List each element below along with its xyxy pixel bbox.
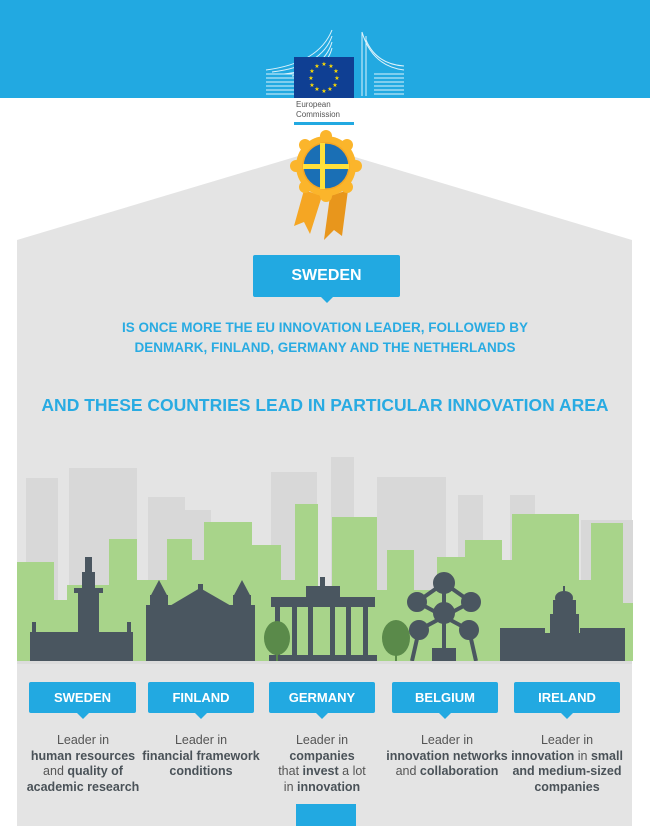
landmark: Stockholm city hall bbox=[30, 557, 133, 661]
EU Commission logo: ★ bbox=[328, 63, 334, 70]
label: Finland: FINLAND bbox=[172, 690, 230, 705]
landmark: Finland building bbox=[146, 580, 255, 661]
EU Commission logo: European bbox=[296, 100, 331, 109]
heading: countries lead: AND THESE COUNTRIES LEAD IN PARTICULAR INNOVATION AREA bbox=[41, 395, 609, 415]
EU Commission logo: ★ bbox=[333, 68, 339, 75]
callout: SWEDEN bbox=[253, 255, 400, 297]
text: Ireland desc: Leader in bbox=[541, 733, 593, 747]
EU Commission logo: ★ bbox=[321, 88, 327, 95]
bottom blue block bbox=[296, 804, 356, 826]
label: Belgium bbox=[392, 682, 498, 713]
EU Commission logo: ★ bbox=[332, 82, 338, 89]
EU Commission logo bbox=[266, 30, 404, 125]
trees bbox=[264, 620, 410, 661]
text: Finland desc: Leader in bbox=[175, 733, 227, 747]
label: Sweden: SWEDEN bbox=[54, 690, 111, 705]
text: Sweden desc bbox=[27, 733, 139, 794]
label: Ireland: IRELAND bbox=[538, 690, 596, 705]
label: Finland bbox=[148, 682, 254, 713]
label: Belgium: BELGIUM bbox=[415, 690, 475, 705]
text: Ireland desc: companies bbox=[534, 780, 600, 794]
ground strip bbox=[17, 661, 632, 664]
text: Sweden desc: human resources bbox=[31, 748, 135, 762]
icon: medal with Swedish flag bbox=[290, 130, 362, 240]
EU Commission logo: ★ bbox=[309, 68, 315, 75]
EU Commission logo: ★ bbox=[321, 61, 327, 68]
EU Commission logo: ★ bbox=[308, 75, 314, 82]
label: Sweden bbox=[29, 682, 136, 713]
text: Ireland desc bbox=[511, 733, 623, 794]
callout: SWEDEN: SWEDEN bbox=[291, 267, 362, 284]
landmark: Atomium bbox=[409, 574, 479, 661]
text: Germany desc: Leader in bbox=[296, 733, 348, 747]
text: Belgium desc: innovation networks bbox=[386, 748, 508, 762]
gray house shape bbox=[17, 148, 632, 826]
EU Commission logo: Commission bbox=[296, 110, 340, 119]
landmark: Brandenburg gate bbox=[269, 577, 377, 661]
text: Germany desc bbox=[278, 733, 366, 794]
text: Germany desc: in innovation bbox=[284, 780, 360, 794]
text: Ireland desc: innovation in small bbox=[511, 748, 623, 762]
label: Germany: GERMANY bbox=[289, 690, 355, 705]
top blue band bbox=[0, 0, 650, 98]
text: Sweden desc: academic research bbox=[27, 780, 139, 794]
text: innovation leader bbox=[122, 320, 528, 355]
text: Germany desc: that invest a lot bbox=[278, 764, 366, 778]
label: Germany bbox=[269, 682, 375, 713]
text: Finland desc: conditions bbox=[169, 764, 233, 778]
text: innovation leader: IS ONCE MORE THE EU INNOVATION LEADER, FOLLOWED BY bbox=[122, 320, 528, 335]
text: Finland desc bbox=[142, 733, 260, 778]
EU Commission logo: ★ bbox=[314, 86, 320, 93]
text: Finland desc: financial framework bbox=[142, 748, 260, 762]
text: Sweden desc: Leader in bbox=[57, 733, 109, 747]
gray back buildings bbox=[26, 457, 633, 661]
text: Ireland desc: and medium-sized bbox=[512, 764, 622, 778]
text: Belgium desc: and collaboration bbox=[396, 764, 498, 778]
text: innovation leader: DENMARK, FINLAND, GERMANY AND THE NETHERLANDS bbox=[134, 340, 516, 355]
EU Commission logo: ★ bbox=[309, 82, 315, 89]
text: Belgium desc bbox=[386, 733, 508, 778]
EU Commission logo: ★ bbox=[334, 75, 340, 82]
green buildings bbox=[17, 504, 633, 661]
label: Ireland bbox=[514, 682, 620, 713]
text: Germany desc: companies bbox=[289, 748, 355, 762]
EU flag bbox=[294, 57, 354, 98]
EU Commission logo: ★ bbox=[327, 86, 333, 93]
text: Sweden desc: and quality of bbox=[43, 764, 123, 778]
landmark: Trinity college bbox=[500, 586, 625, 661]
text: Belgium desc: Leader in bbox=[421, 733, 473, 747]
EU Commission logo: ★ bbox=[314, 63, 320, 70]
